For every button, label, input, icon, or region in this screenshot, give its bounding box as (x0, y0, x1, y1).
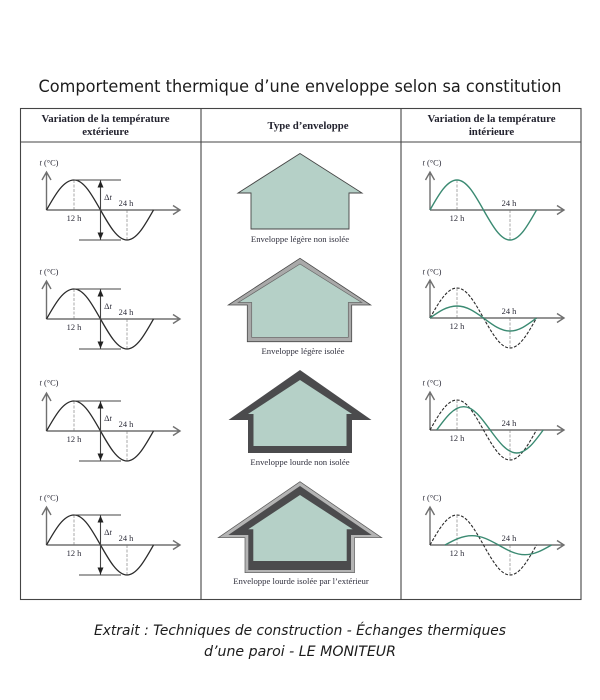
interior chart row 4: t (°C) (423, 494, 442, 502)
exterior chart row 2: t (°C) (40, 268, 59, 276)
comparison table (20, 108, 581, 600)
exterior chart row 1: 12 h (67, 214, 82, 223)
interior chart row 1 (423, 158, 564, 240)
interior chart row 1: 24 h (502, 199, 517, 208)
exterior chart row 2: 24 h (119, 308, 134, 317)
column heading: exterior: extérieure (82, 126, 129, 138)
exterior chart row 4 (40, 494, 180, 575)
exterior chart row 3: 24 h (119, 420, 134, 429)
interior chart row 3: t (°C) (423, 378, 442, 388)
interior chart row 3 (423, 378, 564, 460)
column heading: envelope type: Type d’enveloppe (267, 120, 349, 132)
exterior chart row 4: 12 h (67, 549, 82, 558)
exterior chart row 4: 24 h (119, 534, 134, 543)
column heading: interior: intérieure (469, 126, 514, 138)
interior chart row 4: 12 h (450, 549, 465, 558)
house: heavy uninsulated: Enveloppe lourde non isolée (250, 457, 350, 467)
interior chart row 4: 24 h (502, 534, 517, 543)
interior chart row 1: t (°C) (423, 158, 442, 168)
exterior chart row 3: Δt (104, 414, 113, 423)
exterior chart row 4: Δt (104, 528, 113, 537)
exterior chart row 3 (40, 378, 180, 461)
house: heavy externally insulated: Enveloppe lourde isolée par l’extérieur (233, 576, 369, 586)
table frame and grid (20, 108, 581, 600)
interior chart row 3: 12 h (450, 434, 465, 443)
interior chart row 2 (423, 268, 564, 348)
house: light uninsulated: Enveloppe légère non isolée (251, 234, 349, 244)
exterior chart row 1: Δt (104, 193, 113, 202)
interior chart row 1: 12 h (450, 214, 465, 223)
title: Comportement thermique d’une enveloppe selon sa constitution (38, 77, 562, 96)
exterior chart row 3: 12 h (67, 435, 82, 444)
exterior chart row 4: t (°C) (40, 494, 59, 502)
interior chart row 2: 12 h (450, 322, 465, 331)
interior chart row 3: 24 h (502, 419, 517, 428)
house: heavy externally insulated (218, 482, 382, 586)
house: light insulated (228, 258, 371, 356)
exterior chart row 2: 12 h (67, 323, 82, 332)
exterior chart row 2 (40, 268, 180, 349)
interior chart row 2: t (°C) (423, 268, 442, 276)
exterior chart row 1 (40, 158, 180, 240)
interior chart row 2: 24 h (502, 307, 517, 316)
exterior chart row 1: t (°C) (40, 158, 59, 168)
house: light uninsulated (238, 154, 362, 244)
source caption: Extrait : Techniques de construction - Échanges thermiques (94, 622, 506, 639)
column heading: interior: Variation de la température (427, 113, 556, 125)
house: heavy uninsulated (228, 370, 372, 467)
source caption: d’une paroi - LE MONITEUR (204, 644, 396, 660)
exterior chart row 2: Δt (104, 302, 113, 311)
house: light insulated: Enveloppe légère isolée (262, 346, 345, 356)
exterior chart row 3: t (°C) (40, 378, 59, 388)
exterior chart row 1: 24 h (119, 199, 134, 208)
interior chart row 4 (423, 494, 564, 575)
column heading: exterior: Variation de la température (41, 113, 170, 125)
